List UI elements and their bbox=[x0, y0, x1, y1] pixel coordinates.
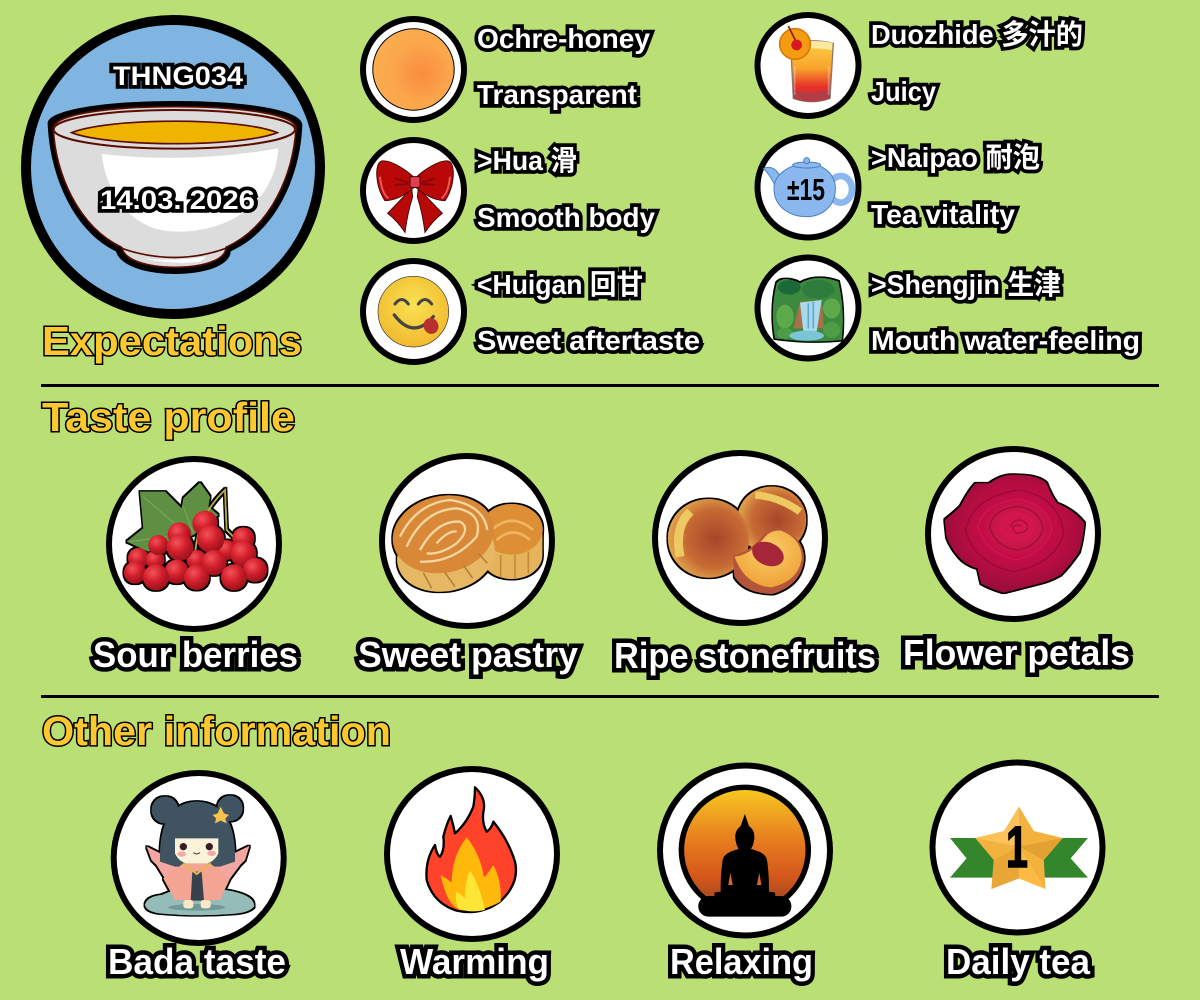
heading: expectations: Expectations bbox=[42, 318, 302, 364]
label: ripe stonefruits: Ripe stonefruits bbox=[614, 635, 876, 676]
item: smooth body bbox=[363, 140, 655, 241]
label: naipao: >Naipao 耐泡 bbox=[871, 142, 1040, 173]
icon: red currants bbox=[124, 483, 267, 590]
icon: flame bbox=[426, 787, 516, 912]
label: huigan: <Huigan 回甘 bbox=[477, 269, 643, 300]
label: smooth body: Smooth body bbox=[477, 202, 655, 233]
label: mouth water-feeling: Mouth water-feeling bbox=[871, 325, 1140, 356]
icon: red rose bbox=[945, 475, 1084, 593]
label: flower petals: Flower petals bbox=[903, 632, 1130, 673]
icon: meditating buddha on sunset bbox=[681, 787, 808, 917]
item: ripe stonefruits bbox=[614, 453, 876, 676]
icon: chibi fairy bbox=[145, 796, 254, 915]
item: tea vitality bbox=[758, 136, 1040, 238]
item: warming bbox=[387, 769, 557, 982]
icon: blue teapot bbox=[763, 158, 852, 217]
label: duozhide: Duozhide 多汁的 bbox=[871, 19, 1083, 50]
item: daily tea bbox=[932, 762, 1102, 982]
item: bada taste bbox=[108, 773, 286, 982]
tea badge bbox=[26, 20, 320, 314]
panel: other information bbox=[42, 708, 1102, 982]
icon: red bow bbox=[377, 161, 453, 232]
panel: expectations bbox=[26, 15, 1140, 364]
icon: tea bowl bbox=[48, 101, 302, 274]
label: warming: Warming bbox=[400, 941, 549, 982]
icon: gold star on ribbon bbox=[950, 807, 1088, 889]
heading: other information: Other information bbox=[42, 708, 391, 754]
icon: ochre colour swatch bbox=[373, 29, 454, 110]
teapot number: ±15 bbox=[787, 172, 825, 207]
heading: taste profile: Taste profile bbox=[42, 394, 295, 440]
label: sweet aftertaste: Sweet aftertaste bbox=[477, 325, 700, 356]
badge code: THNG034 bbox=[113, 61, 243, 91]
item: ochre honey bbox=[363, 19, 650, 120]
panel: taste profile bbox=[42, 394, 1130, 676]
icon: juice glass bbox=[780, 26, 833, 102]
label: hua: >Hua 滑 bbox=[477, 145, 577, 176]
label: sweet pastry: Sweet pastry bbox=[358, 634, 578, 675]
label: ochre-honey: Ochre-honey bbox=[477, 23, 650, 54]
item: sweet aftertaste bbox=[363, 261, 700, 362]
item: flower petals bbox=[903, 449, 1130, 673]
label: bada taste: Bada taste bbox=[108, 941, 286, 982]
label: relaxing: Relaxing bbox=[670, 941, 813, 982]
item: mouth water bbox=[758, 258, 1140, 358]
label: juicy: Juicy bbox=[871, 76, 936, 107]
label: daily tea: Daily tea bbox=[946, 941, 1091, 982]
item: sweet pastry bbox=[358, 456, 578, 675]
star number: 1 bbox=[1006, 815, 1028, 880]
icon: peaches bbox=[668, 487, 806, 594]
label: tea vitality: Tea vitality bbox=[871, 199, 1015, 230]
item: sour berries bbox=[93, 459, 298, 675]
icon: mooncakes bbox=[385, 486, 543, 600]
icon: jungle waterfall bbox=[773, 278, 843, 341]
label: shengjin: >Shengjin 生津 bbox=[871, 269, 1061, 300]
badge date: 14.03. 2026 bbox=[100, 185, 255, 215]
icon: smiling face bbox=[378, 276, 449, 347]
label: transparent: Transparent bbox=[477, 79, 637, 110]
item: relaxing bbox=[660, 766, 830, 982]
item: juicy bbox=[758, 15, 1083, 116]
label: sour berries: Sour berries bbox=[93, 634, 298, 675]
